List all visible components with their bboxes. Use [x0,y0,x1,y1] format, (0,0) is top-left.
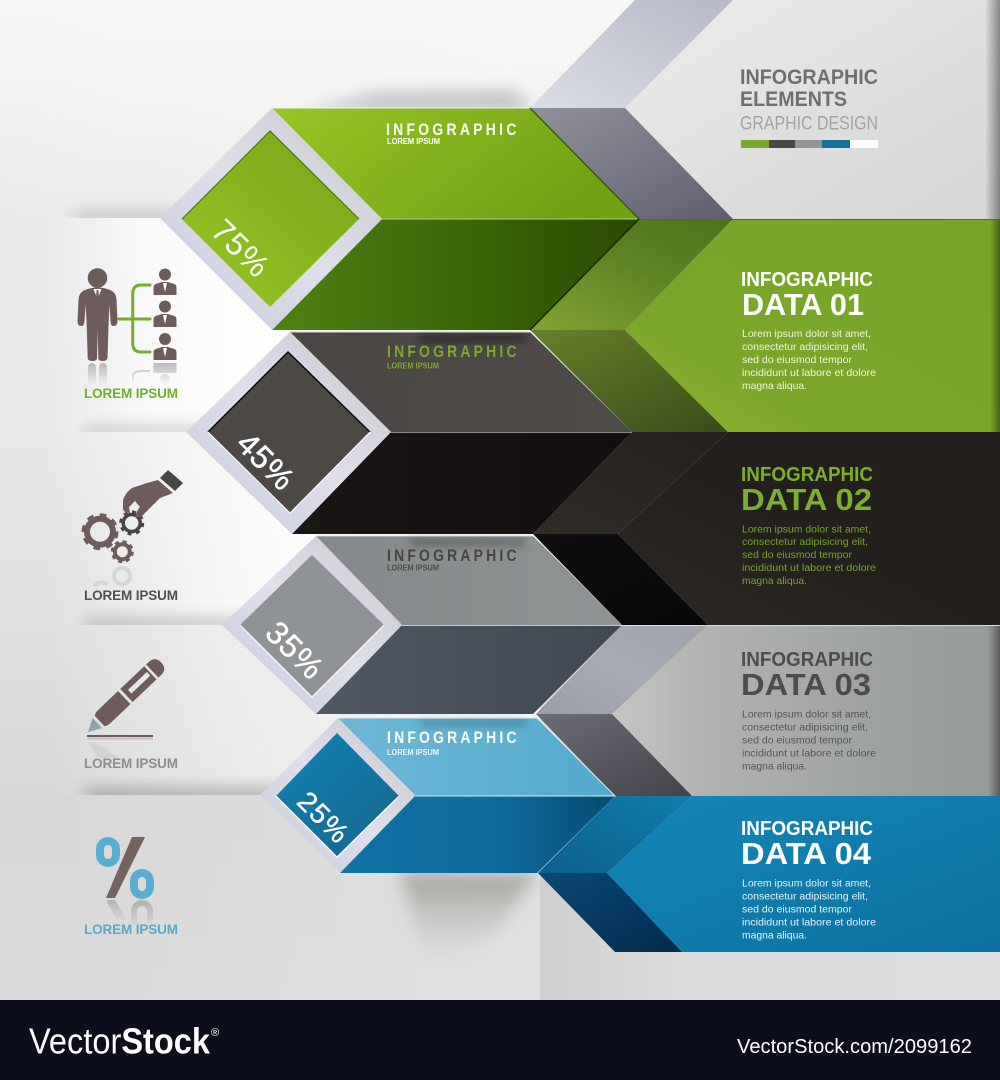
label: lorem ipsum dark: LOREM IPSUM [84,588,178,603]
top chevron decoration [530,0,733,219]
heading: infographic elements: GRAPHIC DESIGN [740,114,878,134]
band 3 text: incididunt ut labore et dolore [742,748,876,760]
large gear [84,515,116,548]
icon: pen [82,656,167,758]
block 3 title: INFOGRAPHIC [387,547,517,565]
band 3 text: INFOGRAPHIC [741,649,873,671]
reflection [106,900,128,922]
percent circle top [100,841,116,863]
band 2 text: sed do eiusmod tempor [742,549,852,561]
band 4 text: DATA 04 [741,836,872,871]
org bracket [119,285,150,352]
small gear [112,542,132,562]
icon: org chart [78,268,176,387]
block 1 title: INFOGRAPHIC [386,121,516,139]
band 4 text: sed do eiusmod tempor [742,904,852,916]
percent slash [106,837,145,898]
band 2 text: Lorem ipsum dolor sit amet, [742,524,871,536]
band 2: data 02 [533,432,1000,625]
band 1 text: DATA 01 [742,287,864,322]
dark gear [121,512,143,534]
percent 25: 25% [291,785,355,849]
block 2: 45% dark [186,332,632,534]
manager figure [78,268,118,361]
percent 45: 45% [230,425,302,497]
percent 35: 35% [259,614,331,686]
colour legend bar [741,140,878,148]
band 3 text: sed do eiusmod tempor [742,734,852,746]
label: lorem ipsum blue: LOREM IPSUM [84,922,178,937]
label: lorem ipsum grey: LOREM IPSUM [84,756,178,771]
block 2 title [387,343,517,371]
band 3 text: Lorem ipsum dolor sit amet, [742,708,871,720]
band 2 text: INFOGRAPHIC [741,464,873,486]
icon: percent [100,837,150,927]
band 4: data 04 [538,796,1000,952]
block 4 title: LOREM IPSUM [387,748,439,757]
band 1 text: Lorem ipsum dolor sit amet, [742,328,871,340]
reflection [88,742,118,758]
footer bar [0,1000,1000,1080]
block 3 title: LOREM IPSUM [387,564,439,572]
footer registered mark: ® [211,1027,219,1039]
band 2 text: incididunt ut labore et dolore [742,562,876,574]
band 2 text: consectetur adipisicing elit, [742,536,868,548]
heading: infographic elements [740,66,878,134]
band 1 text: incididunt ut labore et dolore [742,367,876,379]
band 4 text: incididunt ut labore et dolore [742,916,876,928]
band 3 text: consectetur adipisicing elit, [742,722,868,734]
block 3: 35% grey [222,536,622,714]
label: lorem ipsum green: LOREM IPSUM [84,386,178,401]
band 3 text [741,649,876,772]
block 4 title: INFOGRAPHIC [387,729,517,747]
band 1: data 01 [530,219,1000,432]
percent circle bottom [134,873,150,895]
block 1: 75% green [160,108,639,330]
footer logo: VectorStock [29,1020,211,1062]
heading: infographic elements: INFOGRAPHIC [740,66,878,89]
block 4: 25% blue [260,718,615,873]
band 1 text [741,269,876,392]
band 3 text: DATA 03 [741,667,871,702]
band 1 text: consectetur adipisicing elit, [742,341,868,353]
block 4 title [387,729,517,757]
block 1 title: LOREM IPSUM [387,137,440,146]
band 4 text: Lorem ipsum dolor sit amet, [742,878,871,890]
footer id: VectorStock.com/2099162 [737,1036,972,1058]
band 3 text: magna aliqua. [742,760,807,772]
band 1 text: magna aliqua. [742,380,807,392]
band 2 text: DATA 02 [741,482,872,517]
block 2 title: LOREM IPSUM [387,362,439,371]
reflection [94,568,130,586]
percent 75: 75% [205,212,277,284]
band 4 text: INFOGRAPHIC [741,818,873,840]
band 4 text: consectetur adipisicing elit, [742,890,868,902]
subordinate ties [163,283,167,357]
band 1 text: INFOGRAPHIC [741,269,873,291]
cuff [160,470,183,491]
band 2 text [741,464,876,587]
writing line [87,735,153,737]
icon: hand and gears [84,470,183,586]
shirt and tie [94,289,102,299]
reflection [88,363,176,387]
band 2 text: magna aliqua. [742,575,807,587]
subordinate figures [154,268,176,360]
band 4 text: magna aliqua. [742,930,807,942]
block 2 title: INFOGRAPHIC [387,343,517,361]
band 1 text: sed do eiusmod tempor [742,354,852,366]
heading: infographic elements: ELEMENTS [740,88,847,111]
band 3: data 03 [536,625,1000,796]
band 4 text [741,818,876,942]
hand [123,480,173,518]
